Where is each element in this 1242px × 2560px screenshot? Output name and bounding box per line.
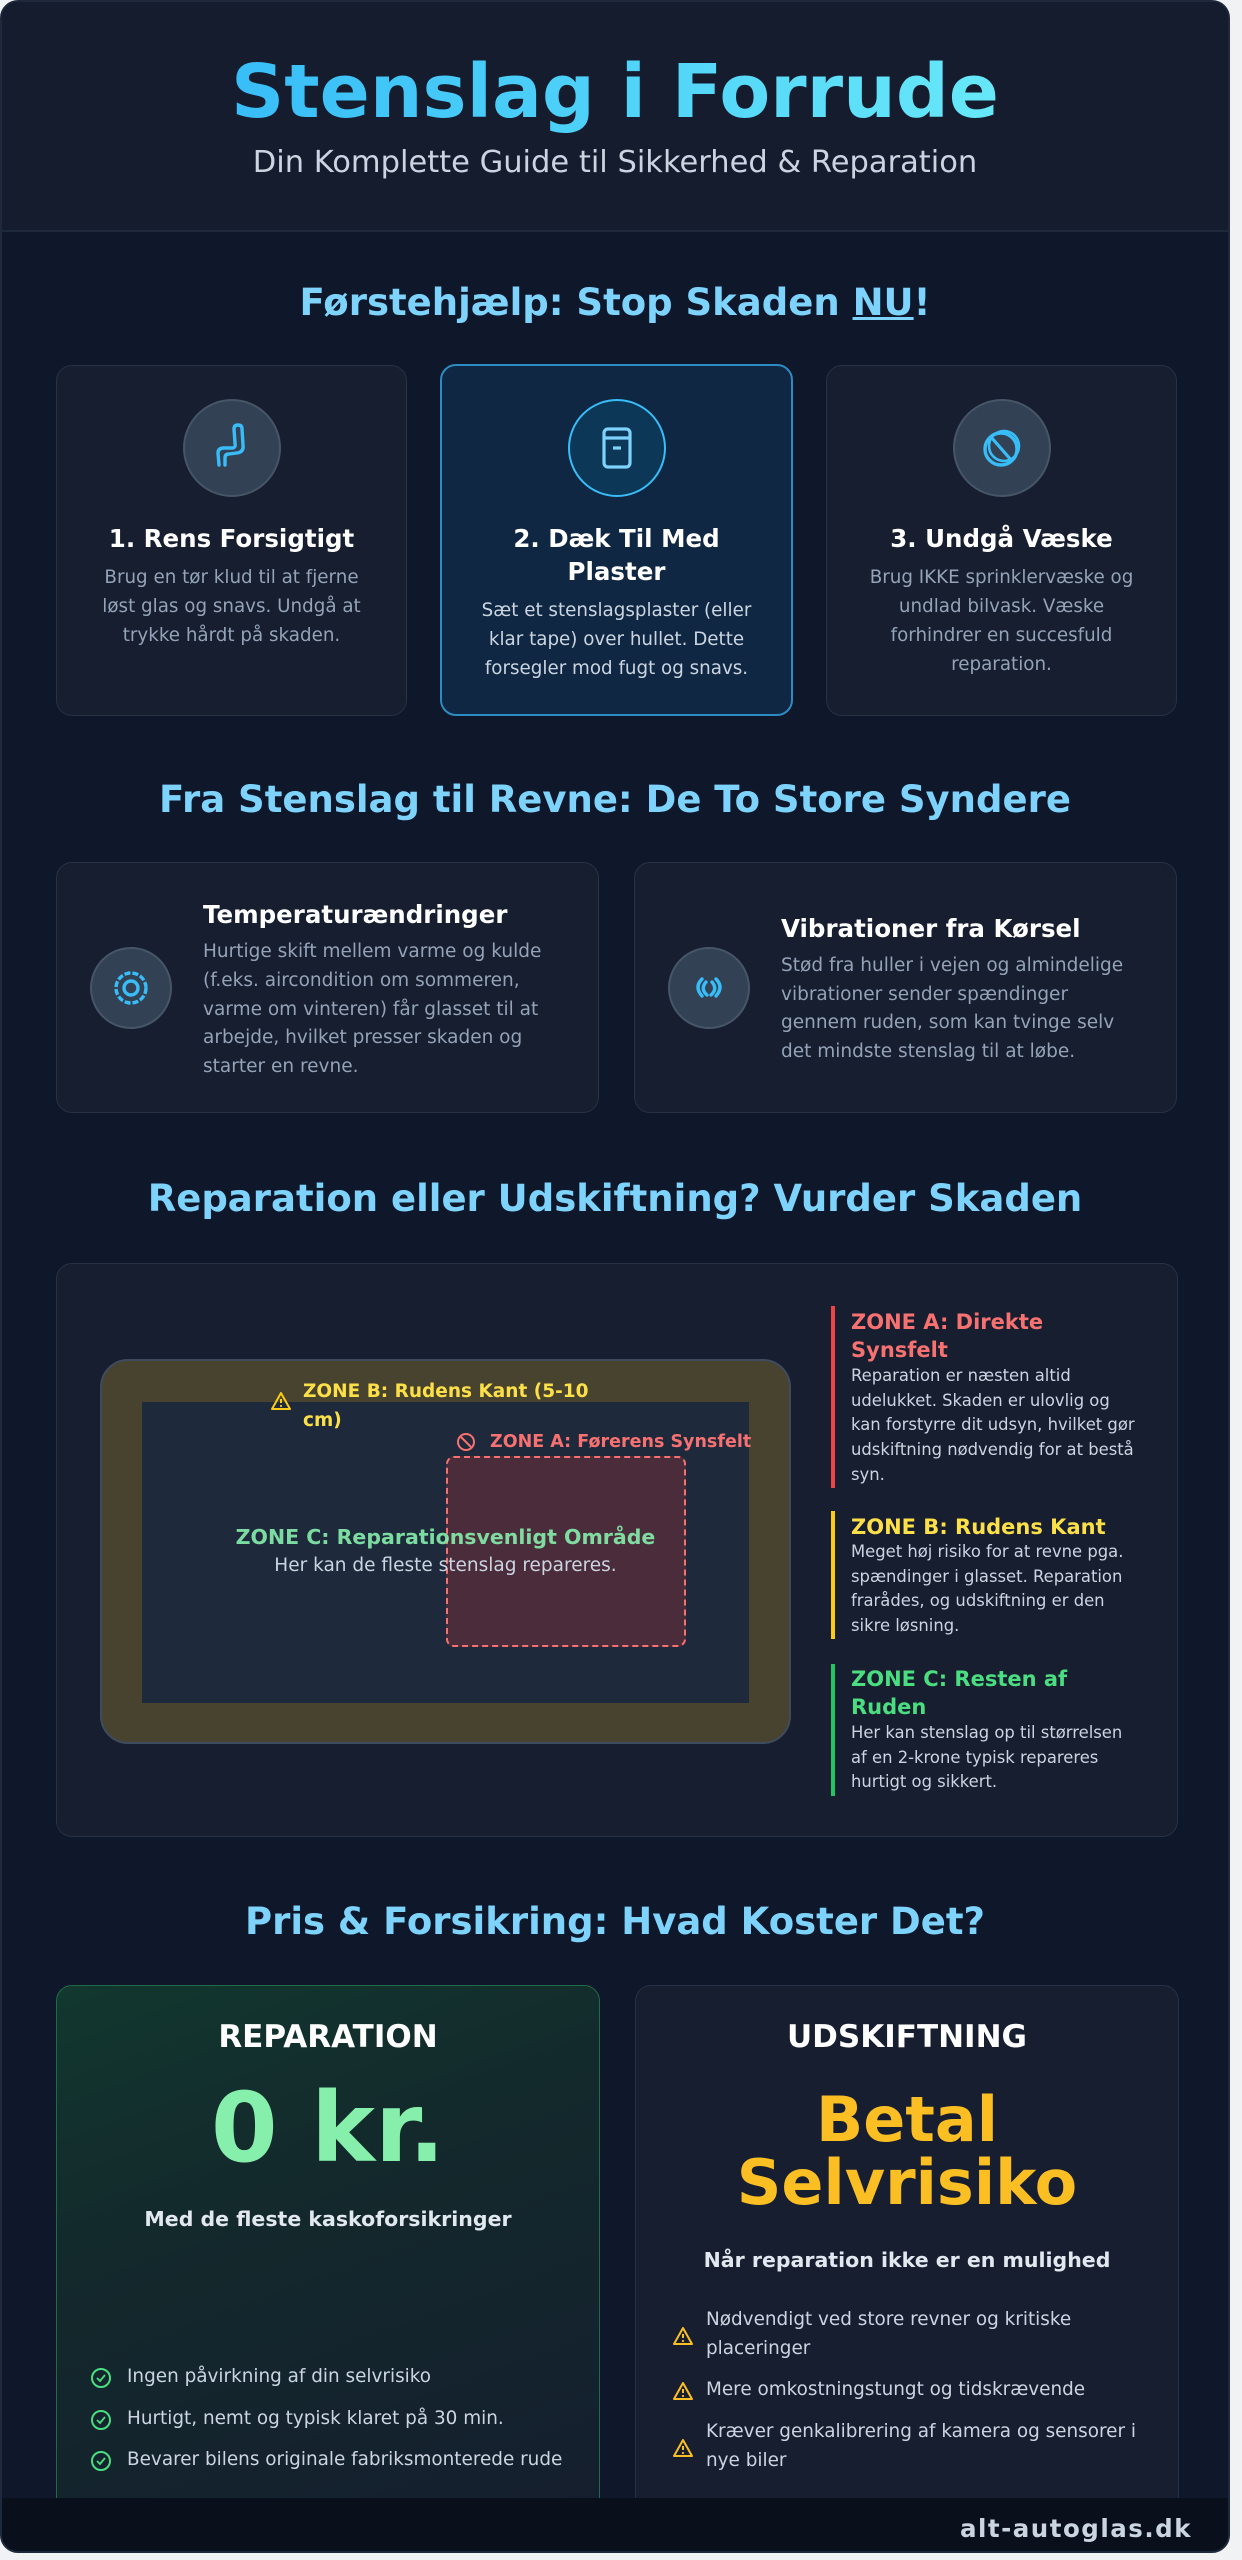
zone C label — [236, 1525, 655, 1576]
card text — [482, 600, 752, 679]
legend: zone B: frarådes, og udskiftning er den — [851, 1591, 1105, 1610]
item — [673, 2309, 1071, 2358]
zone C label: ZONE C: Reparationsvenligt Område — [236, 1525, 655, 1549]
icon: no sign — [457, 1433, 475, 1451]
windshield diagram — [100, 1359, 791, 1744]
zone B label: cm) — [303, 1410, 342, 1431]
big price: Selvrisiko — [737, 2146, 1077, 2219]
legend: zone B: spændinger i glasset. Reparation — [851, 1567, 1122, 1586]
label: UDSKIFTNING — [787, 2019, 1027, 2055]
panel: zone assessment — [56, 1263, 1178, 1837]
panel: vibrations — [634, 862, 1177, 1113]
legend: zone C: af en 2-krone typisk repareres — [851, 1748, 1098, 1767]
text — [781, 955, 1123, 1062]
card text: Sæt et stenslagsplaster (eller — [482, 600, 751, 621]
subline: Med de fleste kaskoforsikringer — [144, 2207, 512, 2231]
card text: forhindrer en succesfuld — [891, 625, 1112, 646]
legend: zone A: syn. — [851, 1465, 885, 1484]
icon: gear/temperature — [90, 947, 172, 1029]
text: starter en revne. — [203, 1056, 358, 1077]
item: Bevarer bilens originale fabriksmonterede rude — [127, 2449, 562, 2470]
heading: zones: Reparation eller Udskiftning? Vurder Skaden — [148, 1177, 1082, 1220]
footer brand: alt-autoglas.dk — [960, 2514, 1192, 2543]
checklist — [91, 2366, 562, 2471]
legend: zone C — [831, 1664, 1122, 1796]
card text — [102, 567, 361, 646]
card title — [513, 524, 720, 586]
item: placeringer — [706, 2338, 810, 2358]
card: rens forsigtigt — [56, 365, 407, 716]
legend: zone C: Ruden — [851, 1695, 926, 1719]
legend: zone A: kan forstyrre dit udsyn, hvilket gør — [851, 1415, 1135, 1434]
legend: zone B: sikre løsning. — [851, 1616, 959, 1635]
panel: udskiftning price — [635, 1985, 1179, 2515]
item: nye biler — [706, 2450, 786, 2470]
text: arbejde, hvilket presser skaden og — [203, 1027, 522, 1048]
item: Ingen påvirkning af din selvrisiko — [127, 2366, 431, 2387]
heading: first aid: Førstehjælp: Stop Skaden NU! — [300, 281, 930, 324]
subtitle: Din Komplette Guide til Sikkerhed & Reparation — [253, 145, 977, 180]
item — [673, 2421, 1136, 2470]
heading: causes: Fra Stenslag til Revne: De To Store Syndere — [159, 778, 1071, 821]
icon: warning — [271, 1392, 291, 1410]
inner glass — [142, 1402, 749, 1703]
legend: zone A: Synsfelt — [851, 1338, 948, 1362]
card text: klar tape) over hullet. Dette — [489, 629, 744, 650]
subline: Når reparation ikke er en mulighed — [704, 2248, 1110, 2272]
footer — [2, 2498, 1228, 2558]
card: dæk til med plaster (highlight) — [440, 364, 793, 716]
legend: zone B — [831, 1511, 1123, 1639]
item: Hurtigt, nemt og typisk klaret på 30 min. — [127, 2408, 504, 2429]
card title: Plaster — [568, 557, 665, 586]
icon: no liquid — [953, 399, 1051, 497]
card text — [870, 567, 1133, 675]
icon: plaster — [568, 399, 666, 497]
text: vibrationer sender spændinger — [781, 984, 1068, 1004]
warning list — [673, 2309, 1136, 2470]
text: (f.eks. aircondition om sommeren, — [203, 970, 520, 991]
legend: zone B: Meget høj risiko for at revne pga. — [851, 1542, 1123, 1561]
zone B label — [271, 1381, 588, 1431]
title: Temperaturændringer — [203, 900, 507, 929]
item: Kræver genkalibrering af kamera og sensorer i — [706, 2421, 1136, 2442]
header — [2, 2, 1228, 232]
icon: hand cleaning — [183, 399, 281, 497]
card title: 3. Undgå Væske — [890, 524, 1113, 553]
icon: vibration — [668, 947, 750, 1029]
label: REPARATION — [218, 2019, 438, 2055]
item: Mere omkostningstungt og tidskrævende — [706, 2379, 1085, 2400]
item: Nødvendigt ved store revner og kritiske — [706, 2309, 1071, 2330]
legend: zone A: udelukket. Skaden er ulovlig og — [851, 1391, 1110, 1410]
card text: undlad bilvask. Væske — [899, 596, 1104, 617]
text: det mindste stenslag til at løbe. — [781, 1040, 1075, 1062]
card text: forsegler mod fugt og snavs. — [485, 658, 748, 679]
zone C label: Her kan de fleste stenslag repareres. — [274, 1555, 617, 1576]
legend: zone A — [831, 1306, 1135, 1488]
legend: zone C: Her kan stenslag op til størrelsen — [851, 1723, 1122, 1742]
text: Hurtige skift mellem varme og kulde — [203, 941, 541, 962]
card text: løst glas og snavs. Undgå at — [102, 596, 361, 617]
text: Stød fra huller i vejen og almindelige — [781, 955, 1123, 976]
legend: zone A: ZONE A: Direkte — [851, 1310, 1043, 1334]
legend: zone C: ZONE C: Resten af — [851, 1667, 1067, 1691]
card title: 1. Rens Forsigtigt — [109, 524, 354, 553]
panel: temperature — [56, 862, 599, 1113]
title: Stenslag i Forrude — [231, 49, 999, 135]
text: gennem ruden, som kan tvinge selv — [781, 1012, 1114, 1033]
legend: zone A: udskiftning nødvendig for at bestå — [851, 1440, 1134, 1459]
legend: zone C: hurtigt og sikkert. — [851, 1772, 997, 1791]
big price — [737, 2083, 1077, 2219]
big price: Betal — [816, 2083, 998, 2156]
card text: trykke hårdt på skaden. — [123, 625, 340, 646]
title: Vibrationer fra Kørsel — [781, 914, 1081, 943]
big price: 0 kr. — [211, 2072, 445, 2184]
zone A label: ZONE A: Førerens Synsfelt — [490, 1432, 751, 1452]
card text: Brug IKKE sprinklervæske og — [870, 567, 1133, 588]
zone B label: ZONE B: Rudens Kant (5-10 — [303, 1381, 588, 1402]
card: undgå væske — [826, 365, 1177, 716]
card title: 2. Dæk Til Med — [513, 524, 720, 553]
legend: zone B: ZONE B: Rudens Kant — [851, 1515, 1106, 1539]
card text: Brug en tør klud til at fjerne — [104, 567, 359, 588]
text: varme om vinteren) får glasset til at — [203, 999, 538, 1020]
zone A box — [446, 1456, 686, 1647]
panel: reparation price — [56, 1985, 600, 2515]
card text: reparation. — [951, 654, 1052, 675]
text — [203, 941, 541, 1077]
heading: price: Pris & Forsikring: Hvad Koster Det? — [245, 1900, 985, 1943]
legend: zone A: Reparation er næsten altid — [851, 1366, 1071, 1385]
